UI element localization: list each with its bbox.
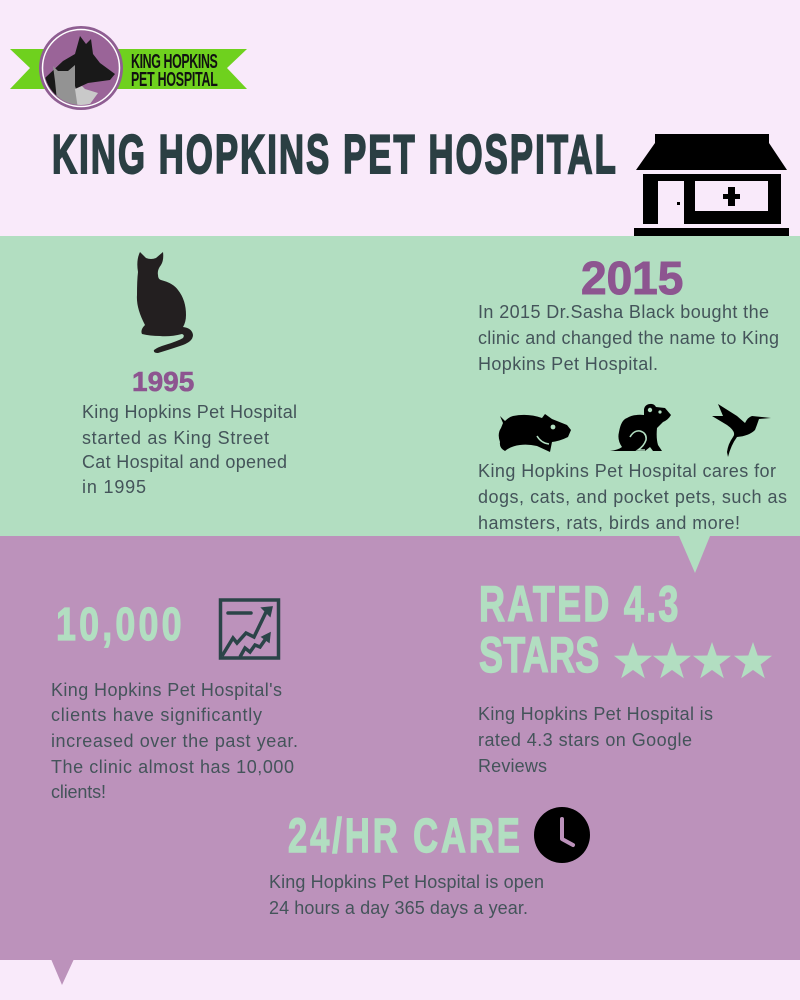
text: clients description: clients!: [51, 782, 106, 802]
heading: 1995: 1995: [132, 366, 194, 397]
text: 2015 description: In 2015 Dr.Sasha Black bought the: [478, 302, 769, 322]
text: hours description: 24 hours a day 365 days a year.: [269, 898, 528, 918]
panel: history: [0, 236, 800, 536]
text: pets description: dogs, cats, and pocket pets, such as: [478, 487, 787, 507]
icon: hospital building: [634, 134, 789, 236]
text: clients description: [51, 680, 298, 802]
logo: PET HOSPITAL: [131, 68, 218, 91]
text: 2015 description: [478, 302, 779, 374]
text: 2015 description: Hopkins Pet Hospital.: [478, 354, 658, 374]
heading: 24/hr care: 24/HR CARE: [288, 808, 520, 862]
text: pets description: hamsters, rats, birds and more!: [478, 513, 740, 533]
text: 2015 description: clinic and changed the name to King: [478, 328, 779, 348]
panel: statistics: [0, 536, 800, 985]
text: hours description: King Hopkins Pet Hospital is open: [269, 872, 544, 892]
icon: clock: [534, 807, 590, 863]
pointer: history to statistics: [679, 536, 710, 573]
heading: rated 4.3 stars: STARS: [479, 628, 599, 683]
text: 1995 description: Cat Hospital and opened: [82, 452, 287, 472]
heading: rated 4.3 stars: RATED 4.3: [479, 577, 678, 632]
text: rating description: Reviews: [478, 756, 547, 776]
text: pets description: King Hopkins Pet Hospital cares for: [478, 461, 776, 481]
icon: hamster: [499, 414, 571, 452]
text: rating description: [478, 704, 713, 776]
heading: rated 4.3 stars: [479, 577, 678, 683]
heading: 2015: 2015: [581, 252, 683, 304]
icon: rat: [610, 404, 671, 451]
text: rating description: King Hopkins Pet Hospital is: [478, 704, 713, 724]
text: rating description: rated 4.3 stars on Google: [478, 730, 692, 750]
logo: KING HOPKINS: [131, 50, 218, 73]
text: 1995 description: in 1995: [82, 477, 146, 497]
text: clients description: King Hopkins Pet Hospital's: [51, 680, 282, 700]
title: KING HOPKINS PET HOSPITAL: [52, 123, 616, 185]
icon: cat: [137, 252, 193, 353]
stat: 10,000 clients: 10,000: [56, 599, 182, 650]
text: hours description: [269, 872, 544, 918]
text: clients description: clients have significantly: [51, 705, 262, 725]
icon: growth chart: [220, 600, 278, 658]
text: 1995 description: King Hopkins Pet Hospital: [82, 402, 297, 422]
text: 1995 description: started as King Street: [82, 428, 269, 448]
text: clients description: increased over the past year.: [51, 731, 298, 751]
icon: four stars: [614, 642, 772, 678]
logo: [10, 26, 247, 110]
text: clients description: The clinic almost has 10,000: [51, 757, 294, 777]
icon: bird: [712, 404, 771, 457]
text: pets description: [478, 461, 787, 533]
text: 1995 description: [82, 402, 297, 497]
